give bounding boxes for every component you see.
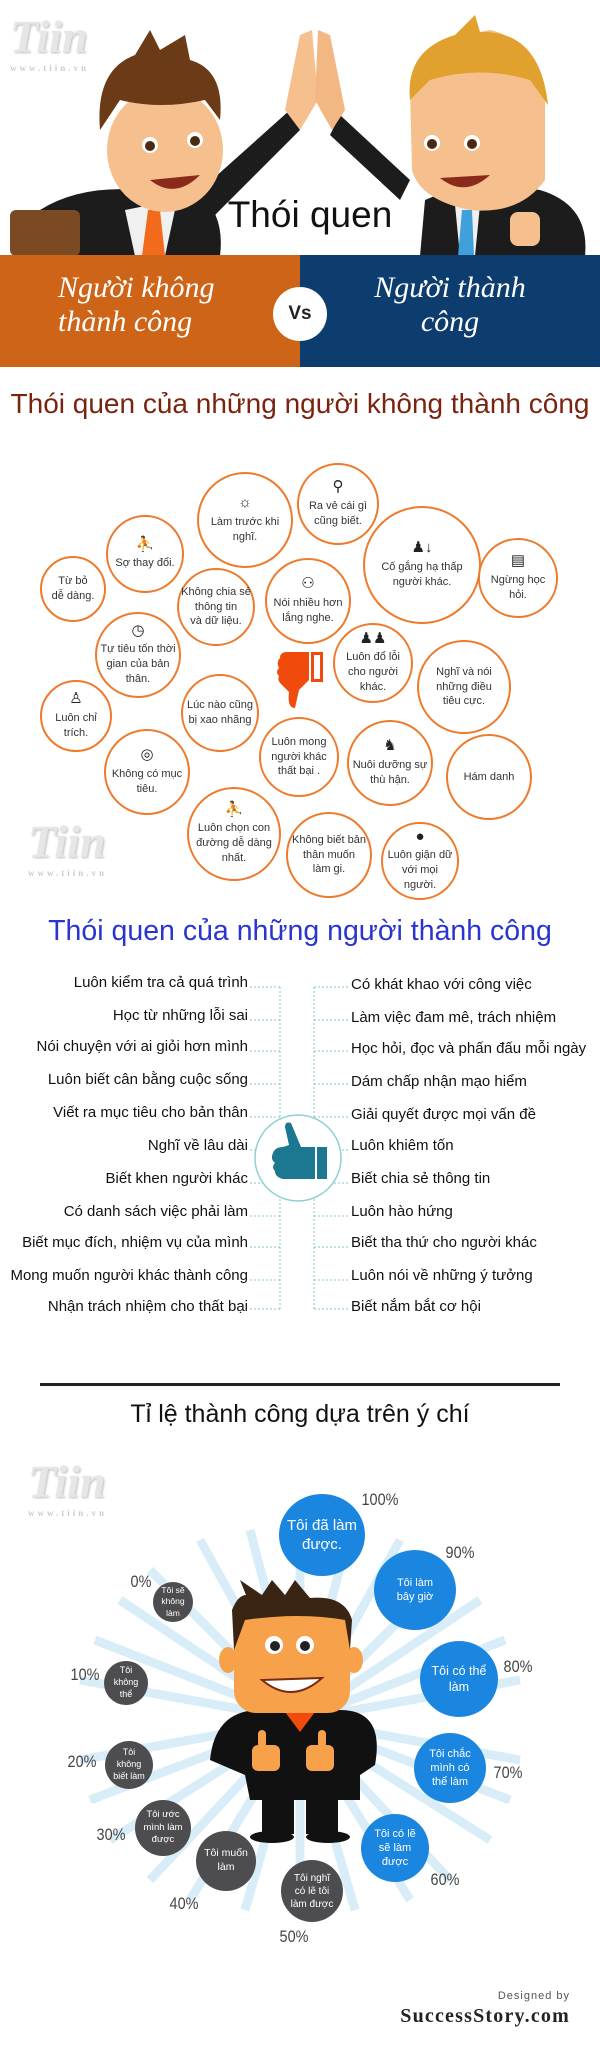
bubble: dễ dàng.	[52, 590, 94, 602]
bubble: cho người	[348, 666, 398, 678]
diagram: successful habits: Biết tha thứ cho người khác	[351, 1234, 537, 1251]
bubble	[286, 812, 372, 898]
bubble: ♟↓	[412, 539, 432, 556]
bubble: cũng biết.	[314, 515, 362, 527]
diagram: successful habits: Học hỏi, đọc và phấn đấu mỗi ngày	[351, 1040, 586, 1057]
credit: designed by: Designed by	[498, 1990, 570, 2002]
bubble: đường dễ dàng	[196, 837, 272, 849]
watermark: Tiin top: www.tiin.vn	[10, 63, 89, 73]
bubble 80%: làm	[449, 1680, 469, 1694]
bubble: nhất.	[222, 852, 246, 864]
bubble: Nuôi dưỡng sự	[353, 759, 427, 771]
bubble 20%	[105, 1741, 153, 1789]
bubble	[181, 674, 259, 752]
bubble 60%: Tôi có lẽ	[374, 1828, 416, 1840]
bubble: ♙	[69, 690, 83, 707]
bubble: tiêu cực.	[443, 695, 485, 707]
diagram: successful habits: Có danh sách việc phải làm	[64, 1203, 248, 1220]
bubble 50%: Tôi nghĩ	[294, 1872, 330, 1884]
bubble: khác.	[360, 681, 386, 693]
bubble 30%: được	[152, 1834, 174, 1845]
bubble 100%	[279, 1494, 365, 1576]
bubble: ⛹	[225, 801, 243, 818]
watermark: Tiin middle: Tiin	[28, 816, 106, 867]
bubble: ●	[415, 828, 425, 845]
bubble chart: success percentages: 60%	[431, 1870, 459, 1889]
watermark: Tiin middle: www.tiin.vn	[28, 868, 107, 878]
bubble 10%: không	[114, 1677, 138, 1687]
title: Thói quen: Thói quen	[228, 194, 392, 235]
diagram: successful habits: Luôn hào hứng	[351, 1203, 453, 1220]
bubble: ⚇	[301, 575, 315, 592]
bubble: nghĩ.	[233, 531, 257, 543]
diagram: successful habits: Giải quyết được mọi vấn đề	[351, 1106, 536, 1123]
bubble: Từ bỏ	[58, 575, 88, 587]
bubble 40%	[196, 1831, 256, 1891]
panel: successful: Người thành	[374, 271, 526, 304]
bubble 90%: bây giờ	[397, 1591, 433, 1603]
diagram: successful habits: Nói chuyện với ai giỏi hơn mình	[37, 1038, 248, 1055]
watermark: Tiin top: Tiin	[10, 11, 88, 62]
diagram: successful habits: Biết mục đích, nhiệm vụ của mình	[22, 1234, 248, 1251]
bubble	[106, 515, 184, 593]
bubble: Tự tiêu tốn thời	[100, 643, 176, 655]
credit: designed by: SuccessStory.com	[400, 2005, 570, 2027]
icon: thumbs down	[277, 652, 323, 708]
bubble: Luôn giận dữ	[388, 849, 452, 861]
diagram: successful habits: Viết ra mục tiêu cho bản thân	[53, 1104, 248, 1121]
bubble: Không có mục	[112, 768, 182, 780]
chart: rays and character	[79, 1529, 521, 1912]
bubble 10%	[104, 1661, 148, 1705]
bubble 20%: không	[117, 1759, 141, 1769]
bubble 70%: thể làm	[432, 1776, 468, 1788]
panel: successful: công	[421, 305, 479, 338]
bubble 50%: làm được	[291, 1898, 333, 1910]
bubble 0%: Tôi sẽ	[161, 1585, 185, 1595]
bubble	[265, 558, 351, 644]
bubble: những điều	[436, 681, 492, 693]
diagram: successful habits: Biết khen người khác	[106, 1170, 248, 1187]
bubble	[417, 640, 511, 734]
vs badge: Vs	[288, 303, 312, 324]
bubble: hỏi.	[509, 589, 527, 601]
bubble chart: success percentages: 50%	[280, 1927, 308, 1946]
bubble chart: success percentages: 80%	[504, 1657, 532, 1676]
bubble: ◷	[131, 622, 145, 639]
diagram: successful habits: Nghĩ về lâu dài	[148, 1137, 248, 1154]
bubble 50%	[281, 1860, 343, 1922]
bubble 40%: Tôi muốn	[204, 1847, 248, 1859]
character	[210, 1580, 377, 1843]
bubble 20%: biết làm	[113, 1771, 145, 1781]
bubble: người khác	[271, 751, 327, 763]
bubble 70%	[414, 1733, 486, 1803]
left items: Luôn kiểm tra cả quá trình	[74, 974, 248, 991]
bubble 0%	[153, 1582, 193, 1622]
bubble 100%: Tôi đã làm	[287, 1516, 357, 1534]
bubble: làm gi.	[313, 863, 345, 875]
bubble 0%: không	[161, 1596, 185, 1606]
diagram: successful habits: Mong muốn người khác thành công	[10, 1267, 248, 1284]
panel: unsuccessful: Người không	[58, 271, 215, 304]
icon: thumbs up circle	[254, 1114, 342, 1202]
watermark: Tiin bottom: www.tiin.vn	[28, 1508, 107, 1518]
bubble: tiêu.	[137, 783, 157, 795]
bubble chart: success percentages: 0%	[131, 1572, 151, 1591]
panel: unsuccessful habits bubbles	[40, 463, 558, 900]
diagram: successful habits: Biết chia sẻ thông tin	[351, 1170, 490, 1187]
diagram: successful habits	[10, 974, 586, 1315]
bubble 100%: được.	[302, 1536, 342, 1553]
bubble chart: success percentages: 30%	[97, 1825, 125, 1844]
bubble: thông tin	[195, 601, 237, 613]
heading: unsuccessful habits: Thói quen của những người không thành công	[11, 388, 589, 419]
bubble 70%: mình có	[430, 1762, 470, 1774]
divider line	[40, 1383, 560, 1386]
bubble: ♞	[383, 737, 397, 754]
bubble 30%: Tôi ước	[146, 1809, 180, 1820]
bubble chart: success percentages	[68, 1490, 532, 1946]
bubble 90%	[374, 1550, 456, 1630]
diagram: successful habits: Luôn nói về những ý tưởng	[351, 1267, 533, 1284]
diagram: successful habits: Biết nắm bắt cơ hội	[351, 1298, 481, 1315]
bubble: và dữ liệu.	[190, 615, 242, 627]
bubble: ◎	[140, 746, 154, 763]
bubble: Ra vẻ cái gì	[309, 500, 367, 512]
bubble chart: success percentages: 100%	[362, 1490, 398, 1509]
bubble: với mọi	[402, 864, 438, 876]
bubble	[363, 506, 481, 624]
bubble: Nói nhiều hơn	[274, 597, 342, 609]
bubble chart: success percentages: 40%	[170, 1894, 198, 1913]
bubble	[95, 612, 181, 698]
bubble: người khác.	[393, 576, 451, 588]
bubble 40%: làm	[218, 1861, 234, 1873]
bubble chart: success percentages: 70%	[494, 1763, 522, 1782]
bubble: Luôn đổ lỗi	[346, 651, 400, 663]
bubble: Làm trước khi	[211, 516, 279, 528]
bubble: Luôn chỉ	[55, 712, 97, 724]
vs badge	[273, 287, 327, 341]
bubble: lắng nghe.	[282, 612, 334, 624]
diagram: successful habits: Làm việc đam mê, trách nhiệm	[351, 1009, 556, 1026]
bubble: Nghĩ và nói	[436, 666, 492, 678]
panel: unsuccessful	[0, 255, 300, 367]
diagram: successful habits: Học từ những lỗi sai	[113, 1007, 248, 1024]
bubble 70%: Tôi chắc	[429, 1748, 471, 1760]
bubble	[177, 568, 255, 646]
banner: versus	[0, 255, 600, 367]
bubble: Hám danh	[464, 771, 514, 783]
bubble: Sợ thay đổi.	[115, 557, 175, 569]
bubble: người.	[404, 879, 436, 891]
bubble: thân muốn	[303, 849, 355, 861]
bubble 80%: Tôi có thể	[432, 1664, 486, 1678]
bubble 90%: Tôi làm	[397, 1577, 433, 1589]
bubble: trích.	[64, 727, 88, 739]
bubble: Ngừng học	[491, 574, 545, 586]
bubble	[259, 717, 339, 797]
bubble: thù hận.	[370, 774, 410, 786]
bubble 50%: có lẽ tôi	[295, 1886, 329, 1896]
bubble 60%: sẽ làm	[379, 1842, 411, 1854]
heading: willpower success rate: Tỉ lệ thành công dựa trên ý chí	[130, 1400, 470, 1428]
bubble 10%: Tôi	[120, 1665, 132, 1675]
bubble: thất bại .	[278, 765, 320, 777]
bubble	[197, 472, 293, 568]
bubble: Luôn mong	[271, 736, 327, 748]
bubble	[478, 538, 558, 618]
bubble: thân.	[126, 673, 150, 685]
watermark: Tiin bottom: Tiin	[28, 1456, 106, 1507]
bubble	[297, 463, 379, 545]
bubble: Luôn chọn con	[198, 822, 270, 834]
bubble: ▤	[511, 552, 525, 569]
bubble chart: success percentages: 20%	[68, 1752, 96, 1771]
bubble 30%: mình làm	[143, 1822, 183, 1833]
illustration: two businessmen high-five	[10, 15, 586, 255]
bubble 30%	[135, 1800, 191, 1856]
bubble	[347, 720, 433, 806]
bubble	[446, 734, 532, 820]
bubble	[333, 623, 413, 703]
bubble	[381, 822, 459, 900]
panel: successful	[300, 255, 600, 367]
bubble: ⚲	[332, 478, 344, 495]
diagram: successful habits: Luôn khiêm tốn	[351, 1137, 454, 1154]
bubble chart: success percentages: 90%	[446, 1543, 474, 1562]
bubble: ♟♟	[360, 630, 386, 647]
bubble	[40, 556, 106, 622]
bubble 80%	[420, 1641, 498, 1717]
heading: successful habits: Thói quen của những người thành công	[48, 915, 552, 947]
bubble: bị xao nhãng	[188, 714, 252, 726]
diagram: successful habits: Luôn biết cân bằng cuộc sống	[48, 1071, 248, 1088]
bubble: gian của bản	[106, 658, 169, 670]
bubble	[40, 680, 112, 752]
diagram: successful habits: Dám chấp nhận mạo hiểm	[351, 1073, 527, 1090]
bubble 60%	[361, 1814, 429, 1882]
right items: Có khát khao với công việc	[351, 976, 532, 993]
bubble: Không chia sẻ	[181, 586, 251, 598]
bubble	[187, 787, 281, 881]
bubble 0%: làm	[166, 1608, 180, 1618]
bubble 10%: thể	[120, 1689, 132, 1699]
bubble: Lúc nào cũng	[187, 699, 253, 711]
bubble: Không biết bản	[292, 834, 366, 846]
bubble: Cố gắng hạ thấp	[381, 561, 463, 573]
bubble	[104, 729, 190, 815]
bubble 20%: Tôi	[123, 1747, 135, 1757]
bubble: ☼	[238, 494, 252, 511]
credit: designed by	[400, 1990, 570, 2027]
panel: unsuccessful: thành công	[58, 305, 192, 338]
bubble 60%: được	[382, 1856, 408, 1868]
bubble: ⛹	[136, 536, 154, 553]
diagram: successful habits: Nhận trách nhiệm cho thất bại	[48, 1298, 248, 1315]
bubble chart: success percentages: 10%	[71, 1665, 99, 1684]
